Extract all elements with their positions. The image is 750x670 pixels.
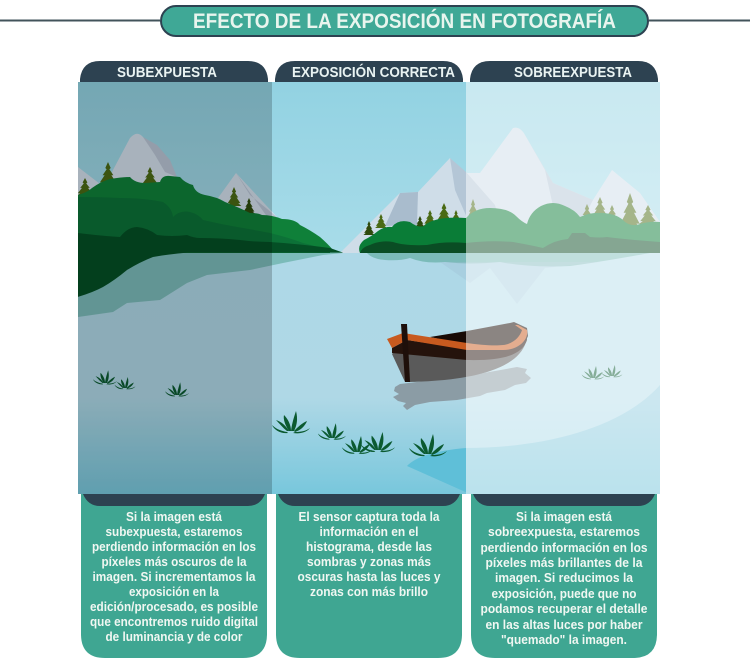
card: subexpuesta: que encontremos ruido digital [90,615,258,629]
card: sobreexpuesta [471,494,657,658]
mountains right [340,128,660,253]
card: subexpuesta: píxeles más oscuros de la [102,555,247,569]
card: sobreexpuesta: exposición, puede que no [492,587,637,601]
card: exposición correcta: histograma, desde las [306,540,432,554]
card: subexpuesta: imagen. Si incrementamos la [92,570,256,584]
header: exposición correcta: EXPOSICIÓN CORRECTA [292,63,455,81]
header: subexpuesta [80,61,268,82]
card: sobreexpuesta: imagen. Si reducimos la [495,571,634,585]
header: sobreexpuesta [470,61,658,82]
reflections [78,253,650,317]
card: subexpuesta: perdiendo información en los [92,540,256,554]
card: exposición correcta: El sensor captura toda la [298,510,440,524]
title banner: EFECTO DE LA EXPOSICIÓN EN FOTOGRAFÍA [193,9,616,33]
water plants [93,365,622,456]
boat [387,322,528,382]
card: exposición correcta [276,494,462,658]
card: subexpuesta [81,494,267,658]
card: exposición correcta: oscuras hasta las luces y [298,570,441,584]
header: subexpuesta: SUBEXPUESTA [117,65,217,81]
card: subexpuesta: edición/procesado, es posible [90,600,258,614]
overexposed overlay [466,82,660,494]
mountains left [78,134,277,218]
panel: description cards [81,494,657,658]
water [78,253,660,494]
card: sobreexpuesta: Si la imagen está [516,510,612,524]
center and right forest [359,203,660,253]
card: subexpuesta: exposición en la [129,585,220,599]
left forest [70,176,343,299]
card: subexpuesta: de luminancia y de color [106,630,243,644]
boat reflection [393,367,531,410]
header: exposición correcta [275,61,463,82]
illustration: lake landscape [70,82,660,494]
card: sobreexpuesta: perdiendo información en los [480,541,648,555]
card: exposición correcta: sombras y zonas más [307,555,431,569]
card: sobreexpuesta: sobreexpuesta, estaremos [488,525,640,539]
panel: column headers [80,61,658,82]
card: sobreexpuesta: en las altas luces por haber [486,618,643,632]
card: sobreexpuesta: podamos recuperar el detalle [480,602,648,616]
title banner [0,6,750,36]
card: subexpuesta: Si la imagen está [126,510,222,524]
trees [77,162,657,235]
sky [78,82,660,254]
underexposed overlay [78,82,272,494]
header: sobreexpuesta: SOBREEXPUESTA [514,65,632,81]
card: sobreexpuesta: "quemado" la imagen. [501,633,627,647]
card: exposición correcta: información en el [320,525,418,539]
card: subexpuesta: subexpuesta, estaremos [106,525,243,539]
card: exposición correcta: zonas con más brillo [310,585,428,599]
card: sobreexpuesta: píxeles más brillantes de la [486,556,644,570]
